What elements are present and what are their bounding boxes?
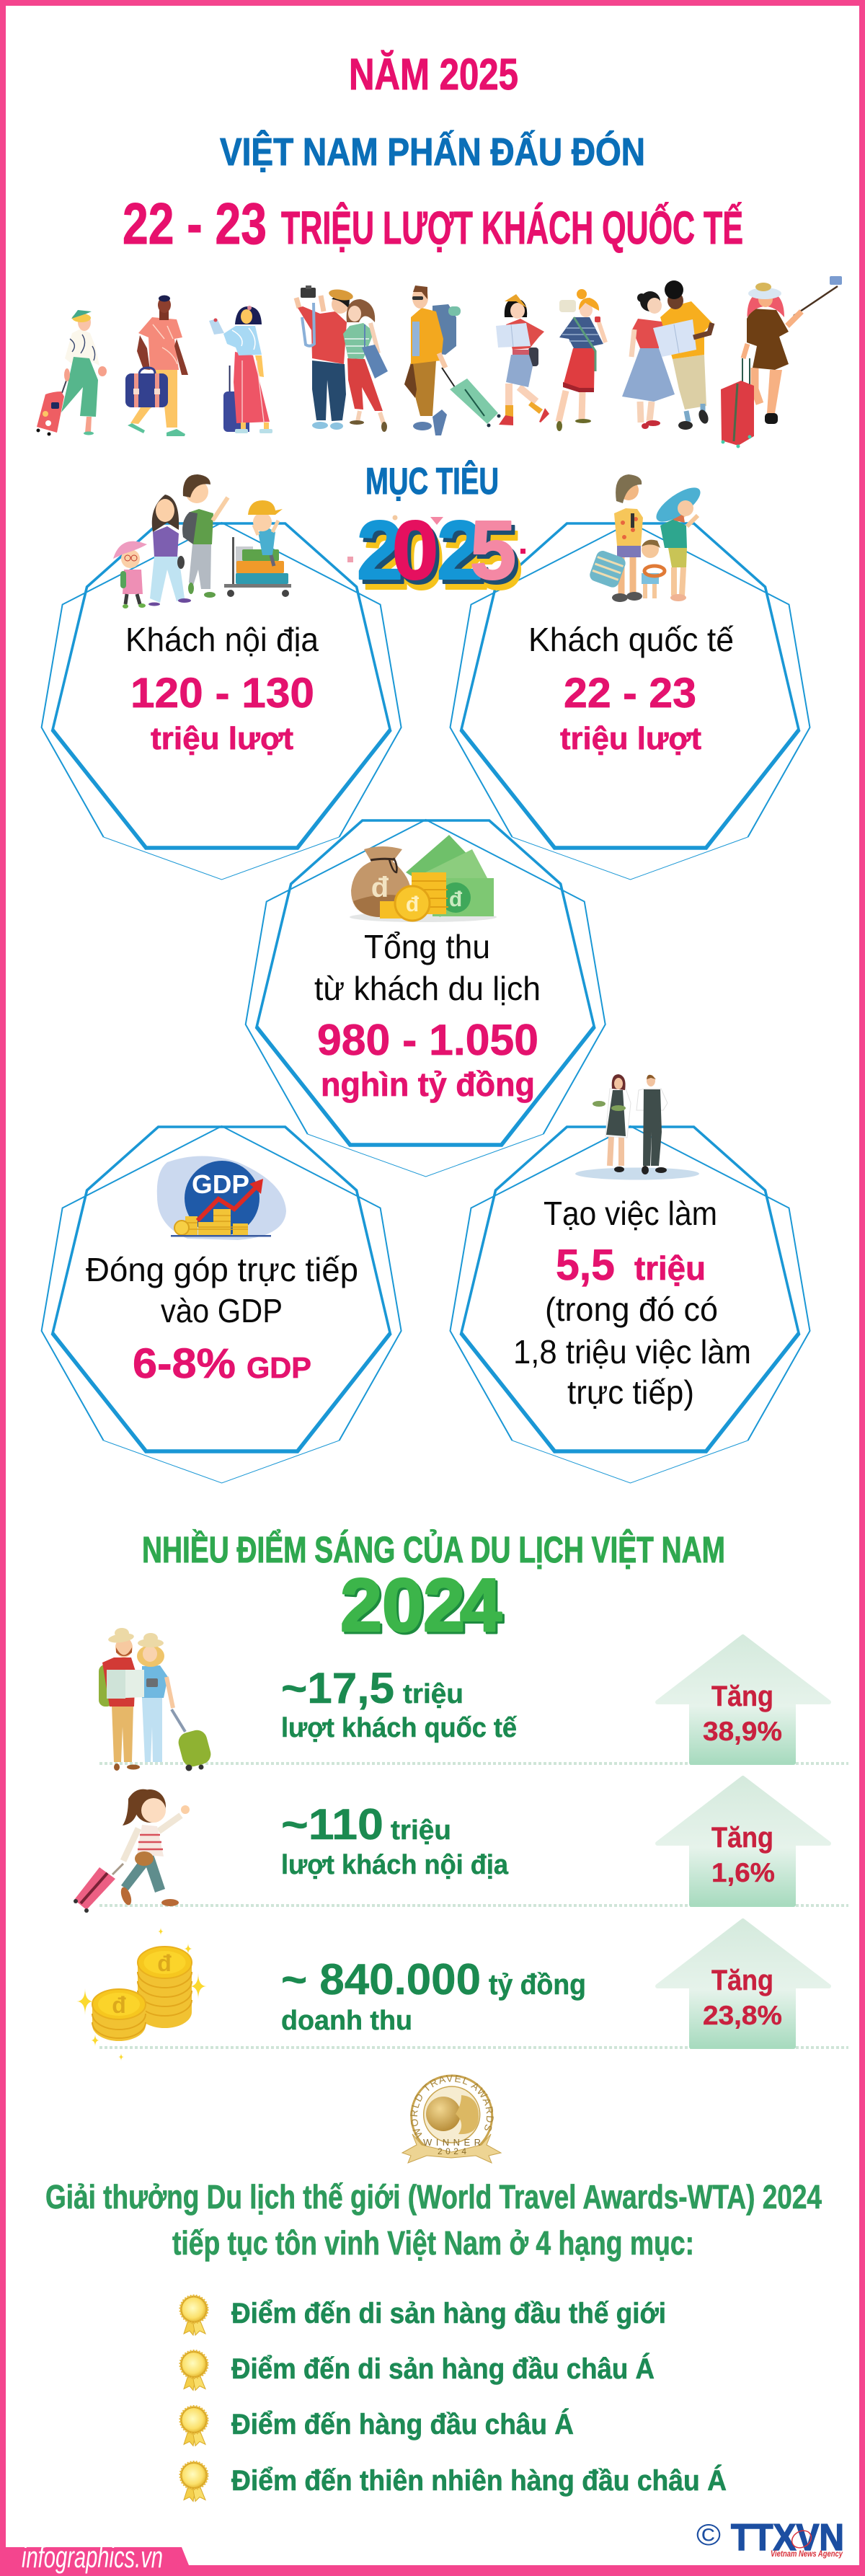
traveller 5 [343,299,388,432]
value: 6-8% [133,1340,236,1387]
arrow: tăng 23,8%: Tăng [711,1965,773,1996]
value: 22 - 23 [564,670,696,717]
value: triệu [634,1249,706,1287]
title [123,50,743,257]
arrow: tăng 1,6% [657,1778,829,1905]
heading: giải thưởng [45,2178,822,2262]
icon: family with luggage [113,474,291,608]
logo: ttxvn: © [696,2518,721,2551]
traveller 1 [36,310,107,435]
icon: couple with map [99,1628,213,1771]
award 2 [180,2350,655,2391]
logo: 2025: 5 [474,508,520,601]
value [133,1340,311,1387]
octagon frame [42,1126,402,1483]
icon: money bag, notes and coins [350,835,497,922]
footer tab: infographics.vn: infographics.vn [22,2540,163,2574]
logo: ttxvn: Vietnam News Agency [771,2549,843,2559]
arrow: tăng 23,8% [657,1921,829,2047]
title line: blue: VIỆT NAM PHẤN ĐẤU ĐÓN [220,130,645,174]
traveller 6 with backpack [404,286,500,435]
logo: 2025: 5 [476,513,523,607]
icon: gdp chart [157,1156,286,1240]
heading: mục tiêu: MỤC TIÊU [365,460,499,503]
icon: hospitality staff [575,1074,699,1179]
label: Khách quốc tế [528,621,734,658]
stat: lượt khách quốc tế [281,1713,518,1743]
traveller 10: selfie [721,276,842,448]
stat: ~17,5 [281,1664,394,1712]
stat: ~ 840.000 [281,1955,481,2004]
arrow: tăng 23,8%: 23,8% [703,2001,782,2030]
logo: 2025: 0 [392,503,438,597]
logo: 2025: 2 [360,508,407,601]
title line: year: NĂM 2025 [349,50,518,99]
stat: triệu [403,1679,463,1709]
logo: 2024: 2 [340,1564,382,1647]
icon: tourist family [588,474,706,602]
arrow: tăng 38,9%: 38,9% [703,1717,782,1746]
note: (trong đó có [545,1291,718,1328]
traveller 4 with camera [296,286,354,430]
label: từ khách du lịch [314,970,541,1007]
panel: tạo việc làm [450,1074,810,1483]
title line: target: 22 - 23 [123,192,267,257]
value: GDP [247,1351,311,1384]
octagon frame [246,820,606,1177]
award 1 [180,2296,666,2335]
award 1: Điểm đến di sản hàng đầu thế giới [231,2298,666,2329]
label [86,1251,358,1329]
dotted baseline [99,1904,848,1907]
award 3: Điểm đến hàng đầu châu Á [231,2408,574,2440]
logo: 2024: 0 [382,1564,424,1647]
value [556,1241,706,1289]
stat: tỷ đồng [489,1969,586,2001]
stat: triệu [391,1815,451,1846]
icon: medal [180,2461,208,2502]
logo: 2025: 2 [440,508,487,601]
value: 980 - 1.050 [317,1016,538,1064]
logo: 2024: 2 [342,1566,384,1650]
octagon frame [42,523,402,880]
value: 120 - 130 [130,670,314,717]
logo: 2025: 0 [396,508,442,601]
dotted baseline [99,2046,848,2049]
icon: gold coin stacks: đ [157,1950,172,1976]
award 4: Điểm đến thiên nhiên hàng đầu châu Á [231,2464,727,2497]
logo: 2025: 2 [363,513,409,607]
label: Đóng góp trực tiếp [86,1251,358,1288]
arrow: tăng 38,9%: Tăng [711,1681,773,1712]
travellers illustration [36,276,842,448]
panel: khách nội địa [42,474,402,880]
logo: 2024: 2 [423,1564,465,1647]
logo: 2025: 5 [470,503,516,597]
arrow: tăng 38,9% [657,1637,829,1763]
unit: triệu lượt [151,721,293,756]
arrow: tăng 1,6%: 1,6% [711,1858,775,1887]
title line: target [123,192,743,257]
label: Khách nội địa [125,621,319,658]
logo: 2025 [347,503,525,607]
award 4 [180,2461,727,2502]
badge: world travel awards: WINNER [423,2137,481,2148]
label: Tổng thu [364,928,490,965]
logo: 2024: 0 [384,1566,426,1650]
stat: ~110 [281,1800,383,1849]
logo: 2024 [340,1564,504,1650]
stat [281,1955,586,2036]
badge: world travel awards [401,2075,502,2164]
icon: medal [180,2296,208,2335]
label: Tạo việc làm [544,1195,717,1232]
logo: 2024: 4 [460,1564,502,1647]
icon: woman with suitcase [74,1789,190,1913]
icon: gold coin stacks [76,1927,207,2061]
dotted baseline [99,1762,848,1765]
award 3 [180,2407,574,2446]
traveller 9: couple with map [622,280,712,430]
logo: 2025: 0 [399,513,445,607]
value: 5,5 [556,1241,615,1289]
row: khách quốc tế 2024 [99,1628,848,1771]
panel: khách quốc tế [450,474,810,880]
panel: tổng thu [246,820,606,1177]
arrow: tăng 1,6%: Tăng [711,1822,773,1854]
unit: nghìn tỷ đồng [321,1066,535,1103]
logo: 2024: 2 [425,1566,467,1650]
badge: world travel awards: 2024 [438,2146,466,2156]
row: doanh thu 2024 [76,1921,848,2061]
unit: triệu lượt [560,721,701,756]
note [513,1291,751,1411]
stat [281,1800,509,1880]
icon: gold coin stacks: đ [112,1992,126,2018]
octagon frame [450,523,810,880]
icon: money bag, notes and coins: đ [371,872,389,903]
traveller 2 [125,296,188,436]
logo: 2025: 2 [437,503,483,597]
award 2: Điểm đến di sản hàng đầu châu Á [231,2353,655,2385]
heading: giải thưởng: tiếp tục tôn vinh Việt Nam ở 4 hạng mục: [172,2224,694,2262]
label [314,928,541,1007]
icon: medal [180,2350,208,2391]
note: 1,8 triệu việc làm [513,1333,751,1371]
icon: money bag, notes and coins: đ [449,888,463,911]
row: khách nội địa 2024 [74,1778,848,1913]
logo: 2025: 2 [443,513,489,607]
logo: 2025: 2 [357,503,403,597]
stat [281,1664,518,1743]
octagon frame [450,1126,810,1483]
traveller 8 [556,289,606,431]
icon: medal [180,2407,208,2446]
stat: doanh thu [281,2006,412,2036]
panel: đóng góp vào gdp [42,1126,402,1483]
label: vào GDP [161,1292,283,1329]
traveller 7 with map [496,294,549,425]
logo: ttxvn: TTXVN [731,2517,844,2559]
logo: 2024: 4 [462,1566,504,1650]
icon: gdp chart: GDP [192,1169,249,1199]
stat: lượt khách nội địa [281,1850,509,1880]
icon: money bag, notes and coins: đ [406,893,420,916]
note: trực tiếp) [567,1373,694,1411]
traveller 3 [209,306,272,433]
badge: world travel awards: WORLD TRAVEL AWARDS [410,2075,494,2138]
